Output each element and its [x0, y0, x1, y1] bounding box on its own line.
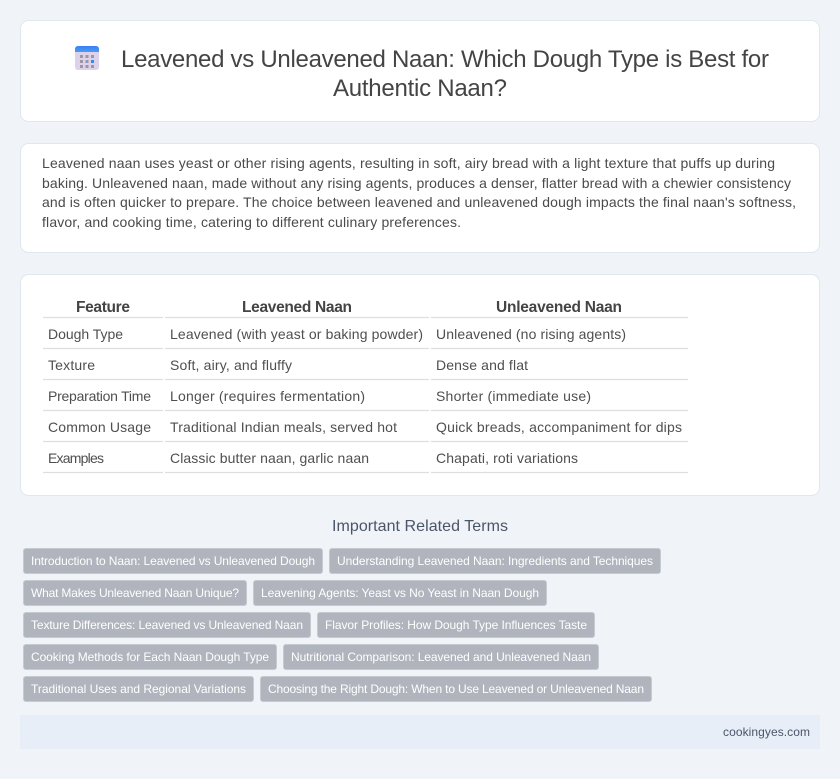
title: Authentic Naan? — [333, 75, 507, 102]
table row: preparation time: Preparation Time — [48, 388, 151, 404]
footer source: cookingyes.com — [723, 725, 810, 739]
table row: texture: Dense and flat — [436, 357, 528, 373]
description text: and is often quicker to prepare. The choice between leavened and unleavened dough impacts the final naan's softness, — [42, 194, 796, 210]
table row: examples: Classic butter naan, garlic naan — [170, 450, 369, 466]
table row: common usage: Common Usage — [48, 419, 151, 435]
table header: Unleavened Naan — [496, 299, 622, 316]
table header: Leavened Naan — [242, 299, 352, 316]
table row: dough type: Leavened (with yeast or baking powder) — [170, 326, 423, 342]
tag — [24, 548, 322, 574]
table row: common usage — [48, 419, 682, 435]
table row: preparation time: Shorter (immediate use) — [436, 388, 591, 404]
table row: preparation time — [48, 388, 591, 404]
tag — [254, 580, 546, 606]
related term tags — [24, 548, 660, 702]
table row: examples: Examples — [48, 450, 104, 466]
table row: dough type: Unleavened (no rising agents) — [436, 326, 626, 342]
table header — [76, 299, 622, 316]
table row: texture: Soft, airy, and fluffy — [170, 357, 292, 373]
tag: Introduction to Naan: Leavened vs Unleavened Dough — [31, 554, 315, 568]
title — [121, 46, 769, 102]
description text: flavor, and cooking time, catering to different culinary preferences. — [42, 214, 461, 230]
table row: common usage: Quick breads, accompaniment for dips — [436, 419, 682, 435]
description text: Leavened naan uses yeast or other rising agents, resulting in soft, airy bread with a light texture that puffs up during — [42, 155, 775, 171]
footer — [20, 715, 820, 749]
tag — [24, 644, 276, 670]
description text: baking. Unleavened naan, made without any rising agents, produces a denser, flatter bread with a chewier consistency — [42, 175, 791, 191]
heading: related terms: Important Related Terms — [332, 518, 508, 535]
tag: Cooking Methods for Each Naan Dough Type — [31, 650, 269, 664]
tag: Understanding Leavened Naan: Ingredients and Techniques — [337, 554, 653, 568]
header panel — [20, 20, 820, 122]
table row: texture: Texture — [48, 357, 95, 373]
table row: dough type: Dough Type — [48, 326, 123, 342]
table row: examples — [48, 450, 578, 466]
tag: Choosing the Right Dough: When to Use Leavened or Unleavened Naan — [268, 682, 644, 696]
tag: Flavor Profiles: How Dough Type Influences Taste — [325, 618, 587, 632]
tag: Texture Differences: Leavened vs Unleavened Naan — [31, 618, 303, 632]
table row: common usage: Traditional Indian meals, served hot — [170, 419, 397, 435]
description text — [42, 155, 796, 230]
tag: Leavening Agents: Yeast vs No Yeast in Naan Dough — [261, 586, 539, 600]
table row: texture — [48, 357, 528, 373]
tag — [260, 676, 652, 702]
tag — [24, 612, 310, 638]
panel: description — [20, 144, 820, 252]
tag: Nutritional Comparison: Leavened and Unleavened Naan — [291, 650, 591, 664]
icon: calendar — [75, 46, 99, 70]
table header: Feature — [76, 299, 130, 316]
tag: Traditional Uses and Regional Variations — [31, 682, 246, 696]
tag — [318, 612, 594, 638]
tag — [330, 548, 660, 574]
tag — [24, 676, 254, 702]
tag — [284, 644, 598, 670]
table row: preparation time: Longer (requires fermentation) — [170, 388, 365, 404]
table row: examples: Chapati, roti variations — [436, 450, 578, 466]
title: Leavened vs Unleavened Naan: Which Dough Type is Best for — [121, 46, 769, 73]
tag: What Makes Unleavened Naan Unique? — [31, 586, 239, 600]
tag — [24, 580, 246, 606]
table row: dough type — [48, 326, 626, 342]
panel: comparison table — [20, 274, 820, 496]
